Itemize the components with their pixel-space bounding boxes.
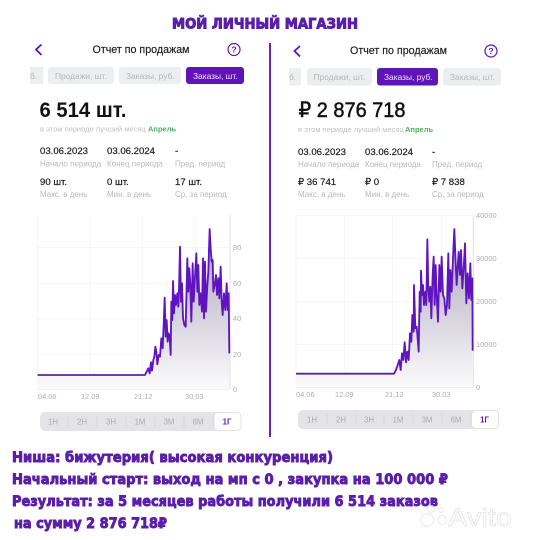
left line chart: 30.03 xyxy=(185,392,204,401)
right total: ₽ 2 876 718 xyxy=(298,99,406,122)
left line chart: 04.06 xyxy=(38,392,56,401)
left header: Отчет по продажам xyxy=(92,44,190,56)
left tabs xyxy=(30,67,244,84)
left tabs: Продажи, шт. xyxy=(55,71,107,81)
right tabs xyxy=(289,68,501,86)
right best month note: в этом периоде лучший месяц xyxy=(298,125,404,134)
right line chart: 0 xyxy=(476,383,480,392)
left line chart: 21.12 xyxy=(134,392,152,401)
summary text: Результат: за 5 месяцев работы получили 6 514 заказов xyxy=(12,494,438,510)
left stats: 90 шт. xyxy=(40,177,67,188)
left stats: 03.06.2024 xyxy=(107,146,156,157)
left stats: Конец периода xyxy=(107,160,163,168)
right line chart: 12.09 xyxy=(335,390,354,399)
left stats xyxy=(40,146,227,199)
right line chart: 30000 xyxy=(476,254,497,263)
left stats: 0 шт. xyxy=(107,177,129,188)
right stats: ₽ 36 741 xyxy=(298,177,336,188)
right stats: ₽ 7 838 xyxy=(432,177,465,188)
right range selector xyxy=(298,410,499,429)
left stats: - xyxy=(175,146,178,157)
left line chart: 80 xyxy=(233,243,241,252)
watermark: Avito xyxy=(420,504,512,532)
right stats: Макс. в день xyxy=(298,190,345,199)
right line chart xyxy=(296,211,497,399)
left tabs: Заказы, шт. xyxy=(193,71,238,81)
right best month note: Апрель xyxy=(405,125,433,134)
summary text xyxy=(12,450,448,532)
left header: ? xyxy=(231,44,237,54)
right header: ? xyxy=(488,46,494,56)
right stats xyxy=(298,147,484,199)
right stats: 03.06.2023 xyxy=(298,147,346,158)
panel: orders in rubles xyxy=(289,45,501,429)
right line chart: 40000 xyxy=(476,211,497,220)
left best month note: Апрель xyxy=(148,124,176,134)
left range selector: 6М xyxy=(193,418,203,426)
right range selector: 3М xyxy=(422,416,432,424)
left range selector: 1Н xyxy=(48,418,58,426)
summary text: Начальный старт: выход на мп с 0 , закупка на 100 000 ₽ xyxy=(12,472,448,488)
right line chart: 04.06 xyxy=(296,390,314,399)
right stats: - xyxy=(432,147,435,158)
right header xyxy=(294,45,497,57)
left line chart: 60 xyxy=(233,279,241,288)
right range selector: 6М xyxy=(451,416,461,424)
right range selector: 3Н xyxy=(364,416,374,424)
left range selector xyxy=(40,412,241,431)
left stats: Начало периода xyxy=(40,160,102,168)
right stats: Конец периода xyxy=(365,160,421,169)
right stats: Ср. за период xyxy=(432,190,484,199)
right line chart: 21.12 xyxy=(385,390,404,399)
left stats: 17 шт. xyxy=(175,177,202,188)
summary text: на сумму 2 876 718₽ xyxy=(14,516,167,532)
watermark: Avito: Avito xyxy=(448,504,512,532)
divider between panels xyxy=(269,43,271,437)
right stats: 03.06.2024 xyxy=(365,147,414,158)
left best month note: в этом периоде лучший месяц xyxy=(40,124,146,134)
left line chart: 40 xyxy=(233,314,241,323)
right header: Отчет по продажам xyxy=(350,45,447,57)
left stats: Пред. период xyxy=(175,160,226,168)
right tabs: б. xyxy=(289,72,296,82)
left line chart: 0 xyxy=(233,385,237,394)
left stats: Макс. в день xyxy=(40,190,87,199)
summary text: Ниша: бижутерия( высокая конкуренция) xyxy=(12,450,333,466)
right tabs: Заказы, шт. xyxy=(450,72,495,82)
right line chart: 10000 xyxy=(476,340,497,349)
title: МОЙ ЛИЧНЫЙ МАГАЗИН xyxy=(172,16,358,32)
right line chart: 20000 xyxy=(476,297,497,306)
panel: orders in units xyxy=(30,44,244,431)
right range selector: 1Г xyxy=(480,416,489,424)
left line chart xyxy=(38,215,241,401)
left tabs: Заказы, руб. xyxy=(126,71,175,81)
left stats: Ср. за период xyxy=(175,190,227,199)
left range selector: 2Н xyxy=(77,418,87,426)
right range selector: 1М xyxy=(393,416,403,424)
left range selector: 1Г xyxy=(223,418,232,426)
right stats: Пред. период xyxy=(432,160,483,169)
right line chart: 30.03 xyxy=(432,390,450,399)
left stats: Мин. в день xyxy=(107,190,151,199)
left range selector: 3Н xyxy=(106,418,116,426)
right tabs: Продажи, шт. xyxy=(314,72,365,82)
right tabs: Заказы, руб. xyxy=(384,72,433,82)
left line chart: 20 xyxy=(233,350,241,359)
left header xyxy=(36,44,240,56)
left tabs: б. xyxy=(30,71,37,81)
right stats: Начало периода xyxy=(298,160,360,169)
left range selector: 1М xyxy=(135,418,145,426)
right stats: Мин. в день xyxy=(365,190,409,199)
left range selector: 3М xyxy=(164,418,174,426)
left stats: 03.06.2023 xyxy=(40,146,88,157)
right range selector: 1Н xyxy=(307,416,317,424)
right stats: ₽ 0 xyxy=(365,177,379,188)
left total: 6 514 шт. xyxy=(40,99,126,122)
left line chart: 12.09 xyxy=(81,392,100,401)
right range selector: 2Н xyxy=(336,416,346,424)
